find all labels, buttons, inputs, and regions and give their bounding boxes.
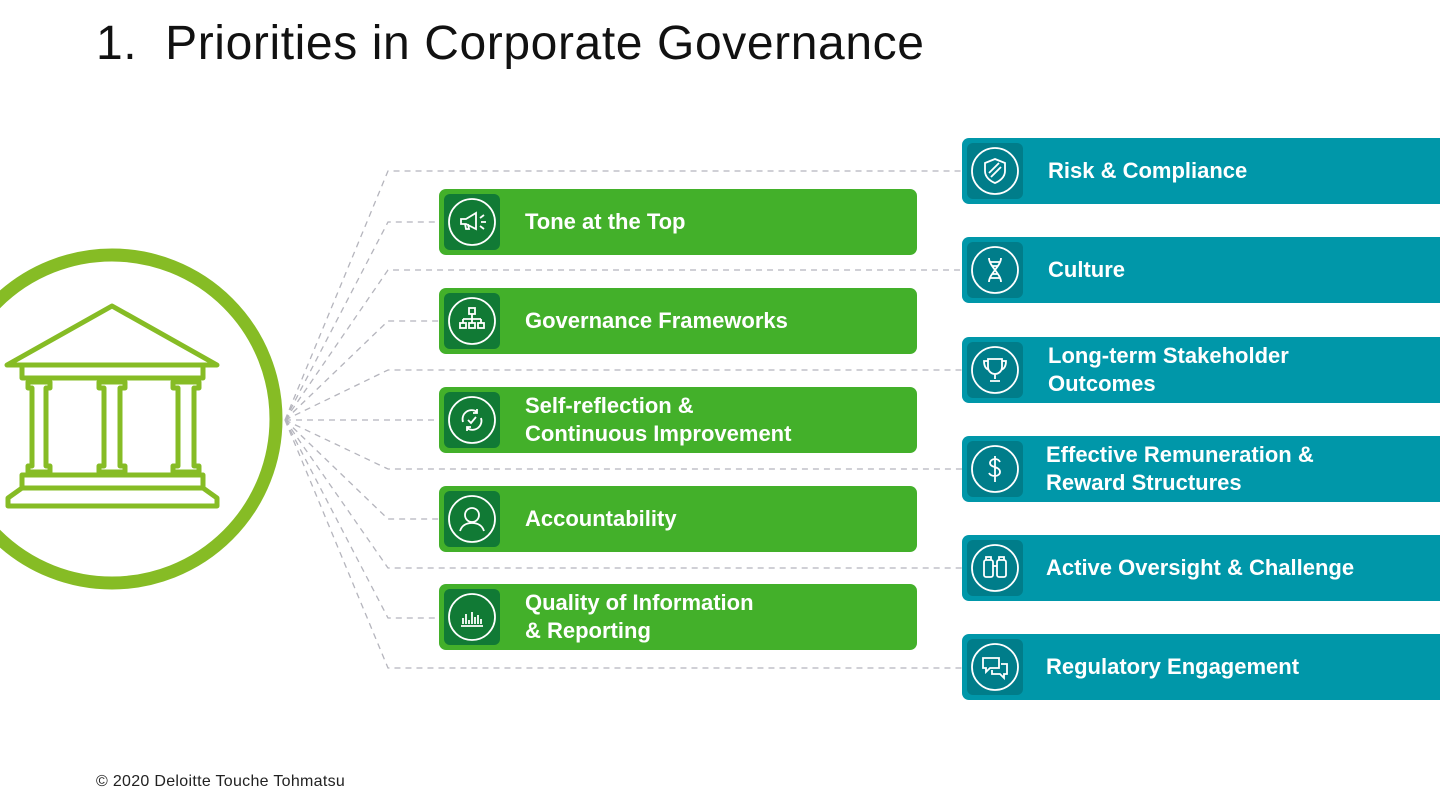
icon: building hub: [0, 248, 282, 590]
green box: Quality of Information: Quality of Information: [525, 590, 754, 615]
teal box: Long-term Stakeholder Outcomes: Outcomes: [1048, 371, 1156, 396]
green box: Accountability: [439, 486, 917, 552]
teal box: Effective Remuneration: Reward Structures: [1046, 470, 1242, 495]
teal box: Active Oversight: Active Oversight & Challenge: [1046, 555, 1354, 580]
teal box: Regulatory Engagement: Regulatory Engagement: [1046, 654, 1299, 679]
teal box: Risk & Compliance: [962, 138, 1440, 204]
green box: Self-reflection: Self-reflection &: [525, 393, 694, 418]
teal box: Culture: Culture: [1048, 257, 1125, 282]
teal box: Effective Remuneration: [962, 436, 1440, 502]
teal box: Regulatory Engagement: [962, 634, 1440, 700]
teal box: Effective Remuneration: Effective Remuneration &: [1046, 442, 1314, 467]
green box: Self-reflection: [439, 387, 917, 453]
green box: Tone at the Top: [439, 189, 917, 255]
green box: Governance Frameworks: Governance Frameworks: [525, 308, 788, 333]
green box: Quality of Information: [439, 584, 917, 650]
green box: Tone at the Top: Tone at the Top: [525, 209, 686, 234]
green box: Self-reflection: Continuous Improvement: [525, 421, 791, 446]
teal box: Culture: [962, 237, 1440, 303]
title: 1. Priorities in Corporate Governance: [96, 17, 925, 70]
teal box: Risk & Compliance: Risk & Compliance: [1048, 158, 1247, 183]
teal box: Active Oversight: [962, 535, 1440, 601]
green box: Quality of Information: & Reporting: [525, 618, 651, 643]
green box: Accountability: Accountability: [525, 506, 677, 531]
teal box: Long-term Stakeholder Outcomes: Long-term Stakeholder: [1048, 343, 1289, 368]
teal box: Long-term Stakeholder Outcomes: [962, 337, 1440, 403]
footer: © 2020 Deloitte Touche Tohmatsu: [96, 773, 345, 790]
green box: Governance Frameworks: [439, 288, 917, 354]
